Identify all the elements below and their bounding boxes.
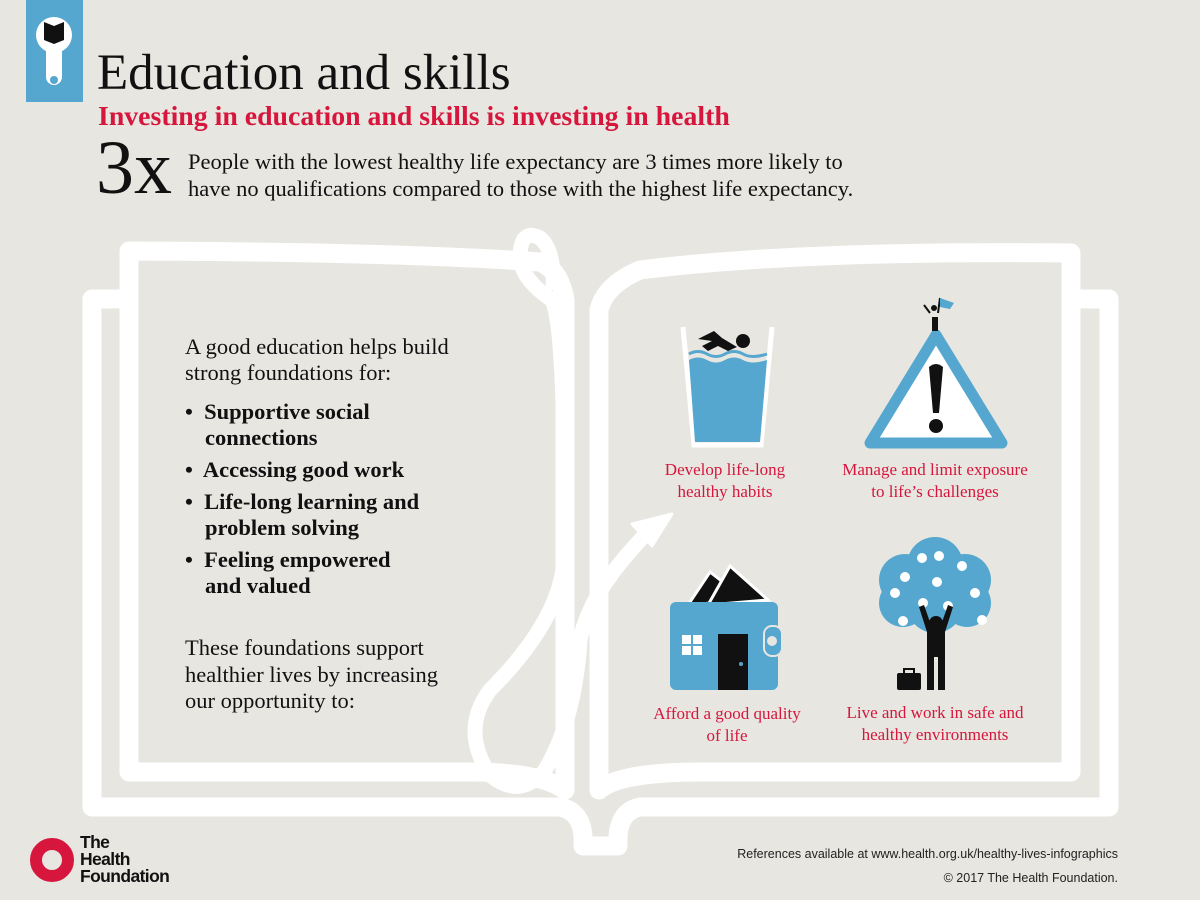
icon: glass with swimmer [680,326,774,448]
caption: challenges [842,460,1028,501]
logo: The Health Foundation: The [80,832,109,852]
footer references: © 2017 The Health Foundation. [944,871,1118,885]
footer references: References available at www.health.org.uk/healthy-lives-infographics [737,847,1118,861]
text block: opportunity: These foundations support healthier lives by increasing our opportunity to: [185,635,438,713]
footer references [737,847,1118,885]
icon: warning triangle with climber [864,298,1008,448]
caption: environments: Live and work in safe and [846,703,1024,722]
statistic: 3x: 3x [96,126,172,210]
icon: tree with person [879,537,991,690]
caption: afford [653,704,801,745]
caption: environments [846,703,1024,744]
caption: habits [665,460,785,501]
outer covers [92,299,1109,846]
loop and arrow [475,236,650,786]
text block: foundations list: • Supportive social connections [185,399,370,450]
logo: The Health Foundation [30,832,169,886]
text block: foundations list: • Accessing good work [185,457,404,482]
caption: habits: healthy habits [678,482,772,501]
caption: habits: Develop life-long [665,460,785,479]
text block: foundations list: A good education helps build strong foundations for: [185,334,449,385]
caption: challenges: Manage and limit exposure [842,460,1028,479]
title: Education and skills [97,45,511,101]
right page [599,253,1071,790]
text block: foundations list: • Feeling empowered and valued [185,547,391,598]
text block: foundations list [185,334,449,598]
icon: header spanner with book [26,0,83,102]
statistic: 3x: People with the lowest healthy life expectancy are 3 times more likely to have no qualifications compared to those with the highest life expectancy. [188,149,853,201]
caption: afford: Afford a good quality [653,704,801,723]
left page [129,251,565,790]
caption: afford: of life [706,726,748,745]
logo: The Health Foundation: Health [80,849,130,869]
logo: The Health Foundation: Foundation [80,866,169,886]
text block: foundations list: • Life-long learning and problem solving [185,489,419,540]
caption: environments: healthy environments [862,725,1008,744]
subtitle: Investing in education and skills is investing in health [98,101,730,132]
statistic: 3x [96,126,853,210]
caption: challenges: to life’s challenges [871,482,999,501]
icon: wallet house [670,564,781,690]
